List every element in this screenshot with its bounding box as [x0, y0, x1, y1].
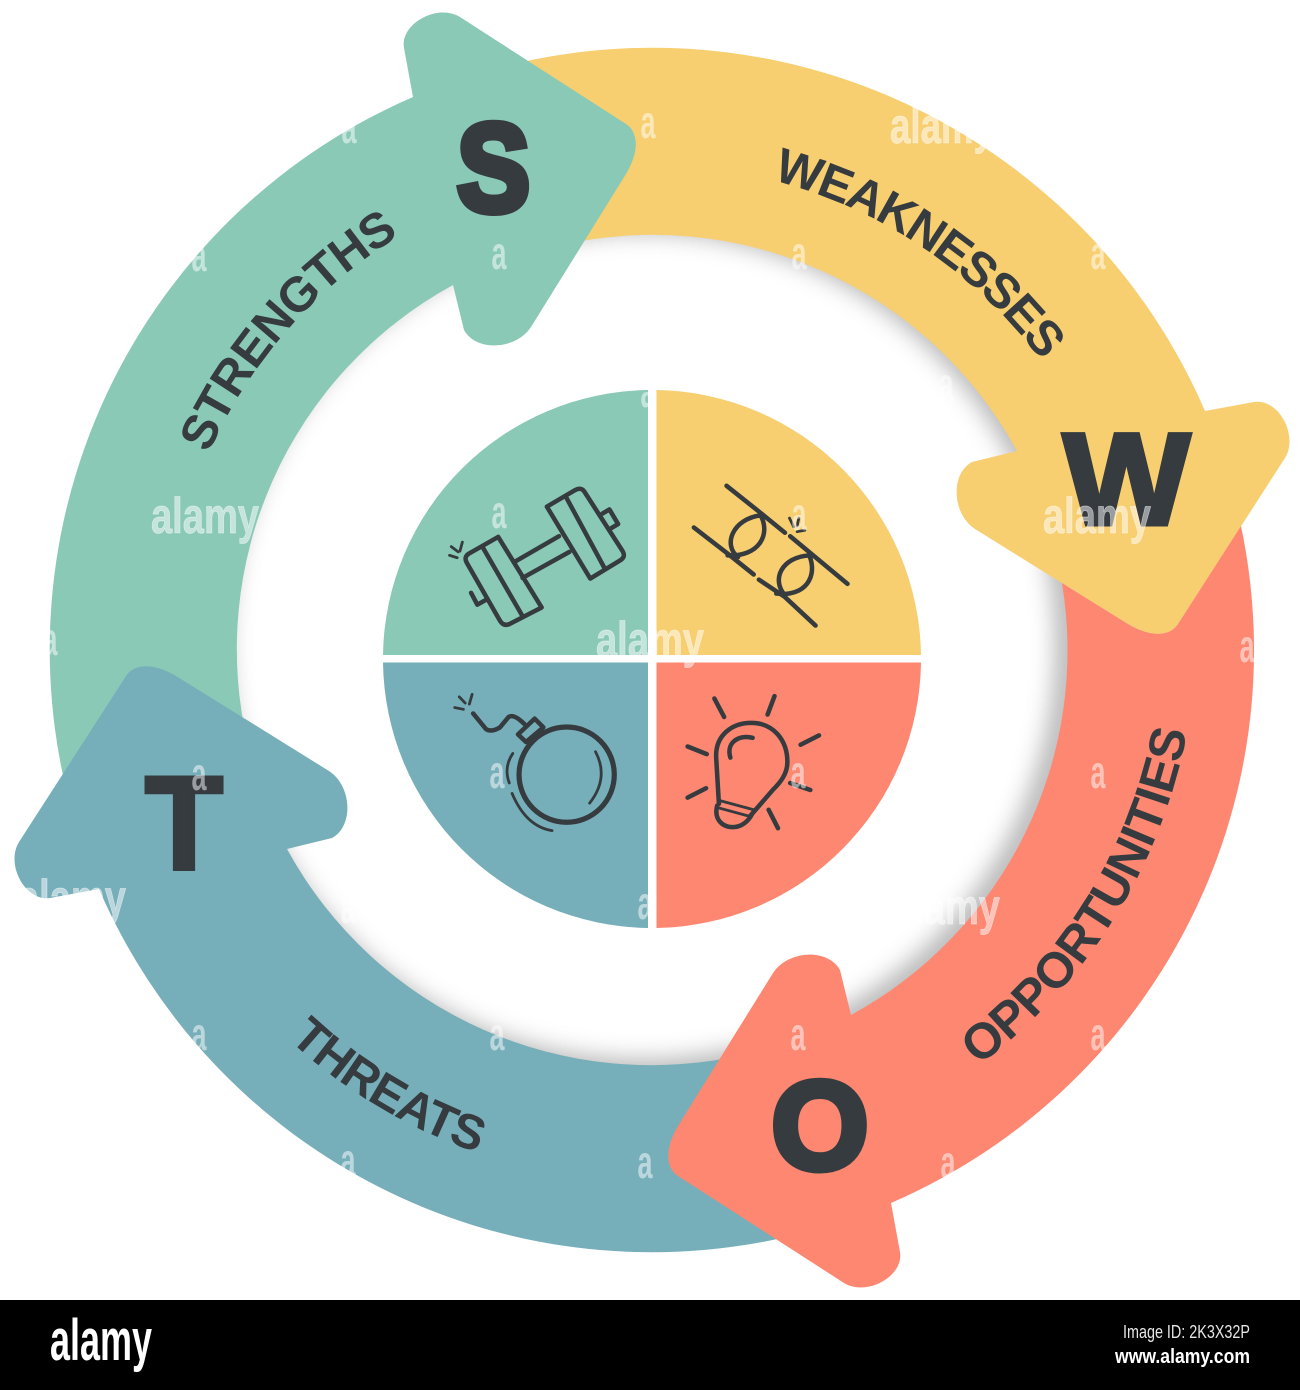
letter S: S: [457, 98, 530, 238]
watermarks: alamy: [18, 870, 126, 926]
watermarks: a: [492, 227, 507, 279]
watermarks: alamy: [890, 98, 994, 154]
arrow: strengths: [50, 12, 636, 774]
icon: dumbbell: [450, 489, 624, 625]
watermarks: a: [792, 488, 807, 540]
watermarks: a: [340, 1134, 356, 1186]
letter W: W: [1063, 407, 1190, 552]
watermarks: alamy: [151, 488, 259, 544]
watermarks: alamy: [1043, 488, 1151, 544]
label: strengths: STRENGTHS: [182, 212, 394, 449]
watermarks: a: [342, 101, 357, 153]
watermarks: alamy: [892, 879, 1000, 935]
quadrant: opportunities: [656, 662, 921, 928]
footer logo: alamy: [50, 1308, 152, 1373]
icon: bomb: [455, 694, 614, 831]
quadrant: strengths: [383, 390, 648, 655]
watermarks: [18, 96, 1255, 1188]
watermarks: a: [192, 748, 207, 800]
watermarks: a: [340, 881, 356, 933]
watermarks: alamy: [596, 612, 704, 668]
icon: light bulb: [688, 696, 819, 828]
watermarks: a: [192, 1008, 207, 1060]
watermarks: a: [940, 1136, 956, 1188]
watermarks: a: [1090, 1008, 1106, 1060]
watermarks: a: [490, 1008, 505, 1060]
icon: broken chain: [694, 486, 848, 626]
watermarks: a: [1090, 746, 1106, 798]
website: www.alamy.com: [1114, 1346, 1250, 1368]
watermarks: a: [1240, 620, 1255, 672]
letter T: T: [145, 749, 223, 898]
watermarks: a: [492, 486, 507, 538]
quadrant: threats: [383, 662, 648, 928]
watermarks: a: [42, 613, 58, 665]
watermarks: a: [490, 746, 505, 798]
arrow: threats: [14, 666, 776, 1252]
watermarks: a: [638, 1136, 653, 1188]
letter O: O: [771, 1057, 869, 1196]
watermarks: a: [790, 1008, 806, 1060]
image id: Image ID: 2K3X32P: [1123, 1322, 1250, 1342]
footer bar: [0, 1300, 1300, 1390]
arrow: weaknesses: [528, 48, 1290, 634]
central pie: [383, 390, 921, 928]
watermarks: a: [790, 746, 806, 798]
arrow: opportunities: [668, 526, 1254, 1288]
watermarks: a: [640, 365, 656, 417]
label: threats: THREATS: [297, 1014, 484, 1150]
watermarks: a: [938, 358, 954, 410]
watermarks: a: [192, 229, 207, 281]
label: opportunities: OPPORTUNITIES: [964, 728, 1185, 1059]
watermarks: a: [638, 877, 653, 929]
watermarks: a: [1090, 227, 1106, 279]
watermarks: a: [792, 227, 807, 279]
watermarks: a: [640, 96, 656, 148]
label: weaknesses: WEAKNESSES: [781, 148, 1063, 356]
quadrant: weaknesses: [656, 390, 921, 655]
